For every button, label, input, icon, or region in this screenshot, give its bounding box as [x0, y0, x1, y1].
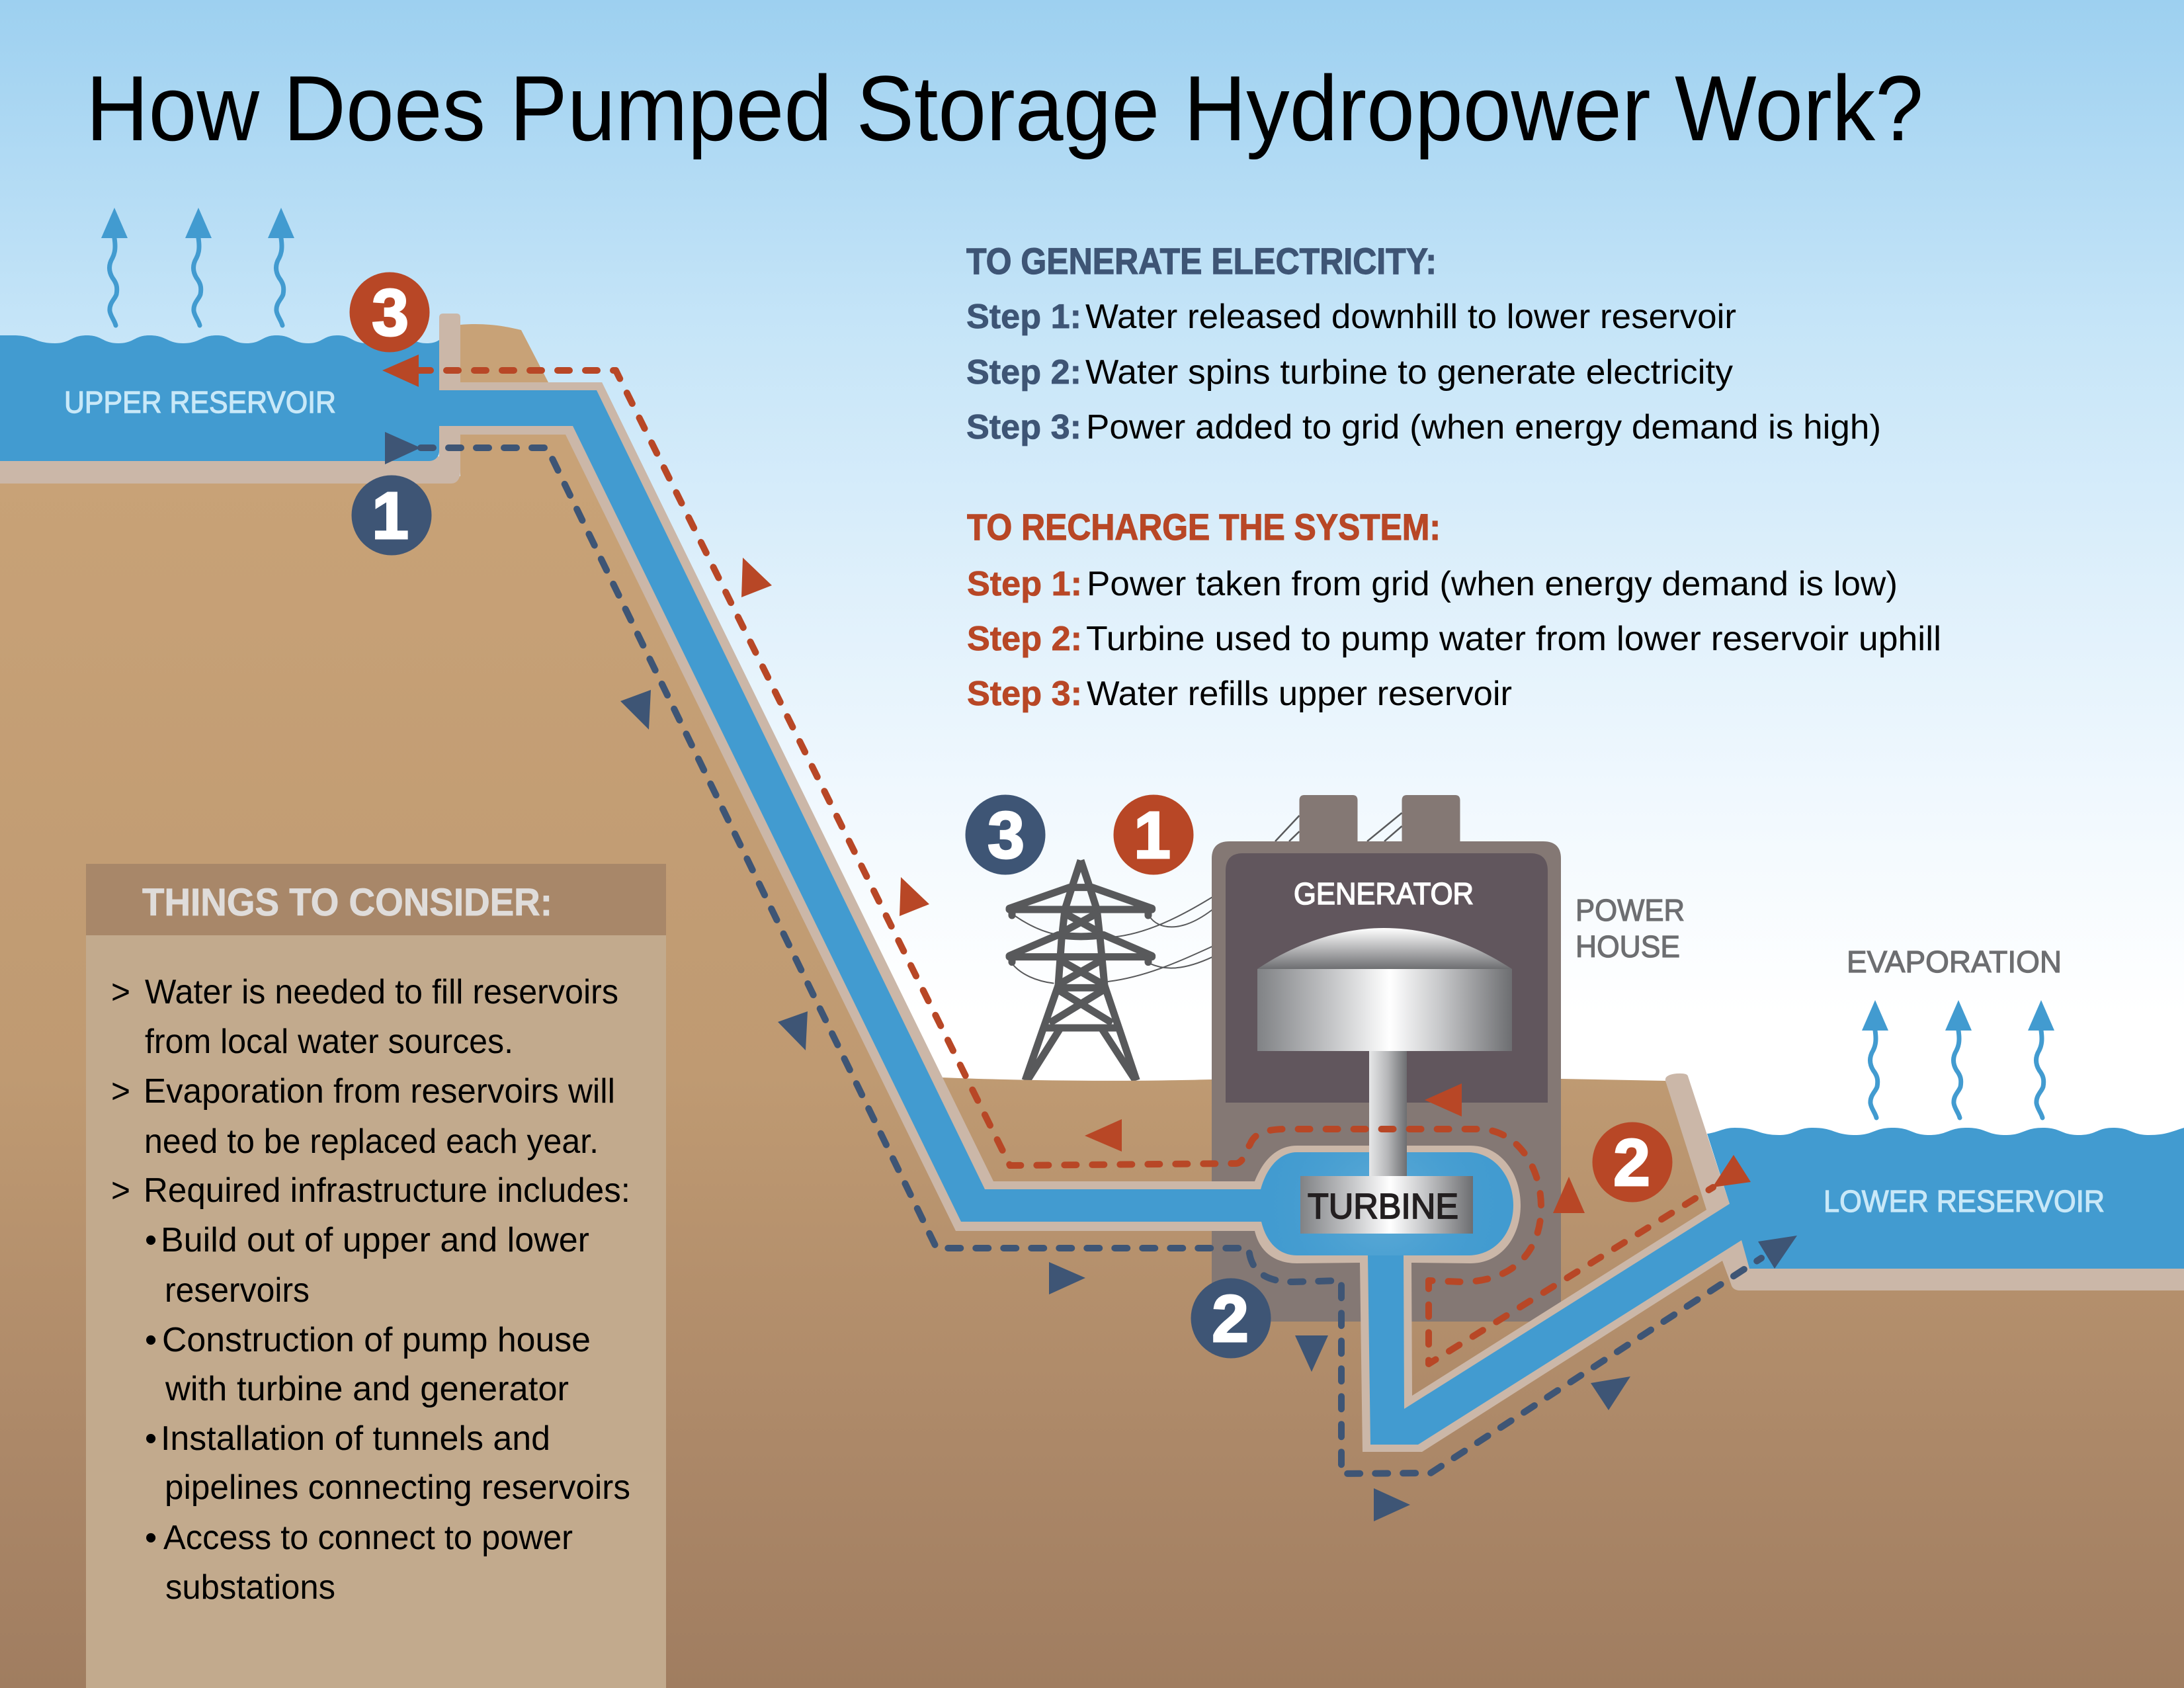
badge: blue 1 at upper reservoir: 1 — [372, 479, 409, 553]
panel list: • — [145, 1419, 157, 1458]
transmission tower — [1009, 813, 1402, 1080]
panel list: Access to connect to power — [163, 1519, 573, 1557]
label: upper reservoir: UPPER RESERVOIR — [64, 385, 336, 419]
text block: to generate electricity: Step 3: — [966, 408, 1081, 446]
text block: to recharge the system: Turbine used to pump water from lower reservoir uphill — [1086, 620, 1941, 658]
badge: red 2 at turbine — [1593, 1122, 1672, 1203]
panel list: > — [111, 1171, 130, 1210]
panel list: reservoirs — [165, 1271, 310, 1310]
turbine: TURBINE — [1308, 1187, 1458, 1226]
text block: to generate electricity — [966, 240, 1881, 446]
panel: things to consider — [86, 864, 666, 1688]
text block: to generate electricity: Power added to grid (when energy demand is high) — [1086, 408, 1881, 446]
text block: to generate electricity: Water released downhill to lower reservoir — [1085, 298, 1736, 336]
badge: blue 2 at turbine — [1191, 1278, 1271, 1359]
label: generator: GENERATOR — [1294, 876, 1474, 911]
label: evaporation: EVAPORATION — [1847, 945, 2062, 979]
panel heading — [86, 864, 666, 935]
dashed flow line: generate (blue) — [421, 448, 1761, 1474]
power house building — [1212, 795, 1561, 1322]
heading: recharge: TO RECHARGE THE SYSTEM: — [967, 506, 1441, 548]
water: reservoirs, penstock, chamber — [0, 335, 2184, 1445]
badge: blue 3 at tower: 3 — [987, 798, 1025, 872]
badge: red 3 at upper reservoir: 3 — [372, 276, 409, 350]
panel list: Water is needed to fill reservoirs — [145, 973, 618, 1011]
panel list: Construction of pump house — [162, 1321, 591, 1359]
badge: blue 1 at upper reservoir — [352, 475, 431, 556]
heading: generate: TO GENERATE ELECTRICITY: — [966, 240, 1437, 282]
text block: to recharge the system: Step 2: — [967, 620, 1082, 658]
panel list: • — [145, 1321, 157, 1359]
badge: red 2 at turbine: 2 — [1613, 1126, 1650, 1200]
panel list: Build out of upper and lower — [161, 1221, 589, 1259]
generator unit — [1257, 876, 1512, 1176]
blue flow arrows — [385, 432, 1797, 1521]
red flow arrows — [382, 355, 1751, 1213]
panel heading: THINGS TO CONSIDER: — [142, 881, 552, 924]
turbine — [1300, 1176, 1473, 1234]
badge: blue 2 at turbine: 2 — [1212, 1282, 1249, 1356]
panel list: > — [111, 973, 130, 1011]
badge: red 1 at tower: 1 — [1134, 798, 1171, 872]
text block: to recharge the system: Step 3: — [967, 675, 1082, 713]
text block: to generate electricity: Water spins turbine to generate electricity — [1085, 353, 1733, 392]
panel list: need to be replaced each year. — [144, 1122, 599, 1161]
panel list: Evaporation from reservoirs will — [144, 1072, 615, 1111]
badge: red 1 at tower — [1114, 795, 1193, 874]
badge: blue 3 at tower — [966, 795, 1045, 874]
panel list: substations — [165, 1568, 335, 1607]
title: How Does Pumped Storage Hydropower Work? — [86, 56, 1923, 160]
text block: to generate electricity: Step 2: — [966, 353, 1081, 392]
label: lower reservoir: LOWER RESERVOIR — [1824, 1184, 2105, 1218]
text block: to recharge the system: Water refills upper reservoir — [1087, 675, 1512, 713]
panel list — [111, 973, 630, 1607]
panel list: • — [145, 1221, 157, 1259]
pipe and reservoir lining — [0, 314, 2184, 1452]
badge: red 3 at upper reservoir — [349, 273, 430, 352]
text block: to recharge the system: Step 1: — [967, 565, 1082, 603]
panel list: pipelines connecting reservoirs — [165, 1468, 630, 1507]
text block: to generate electricity: Step 1: — [966, 298, 1081, 336]
dashed flow line: recharge (red) — [419, 370, 1713, 1364]
panel list: > — [111, 1072, 130, 1111]
label: power house: HOUSE — [1575, 929, 1680, 964]
panel list: • — [145, 1519, 157, 1557]
text block: to recharge the system — [967, 506, 1941, 713]
text block: to recharge the system: Power taken from grid (when energy demand is low) — [1087, 565, 1898, 603]
label: power house: POWER — [1575, 893, 1685, 927]
panel list: Installation of tunnels and — [161, 1419, 550, 1458]
label: power house — [1575, 893, 1685, 964]
evaporation arrows: upper reservoir — [101, 208, 294, 325]
evaporation arrows: lower reservoir — [1862, 1000, 2054, 1118]
panel list: with turbine and generator — [165, 1370, 569, 1408]
panel list: from local water sources. — [145, 1023, 513, 1061]
panel list: Required infrastructure includes: — [144, 1171, 630, 1210]
